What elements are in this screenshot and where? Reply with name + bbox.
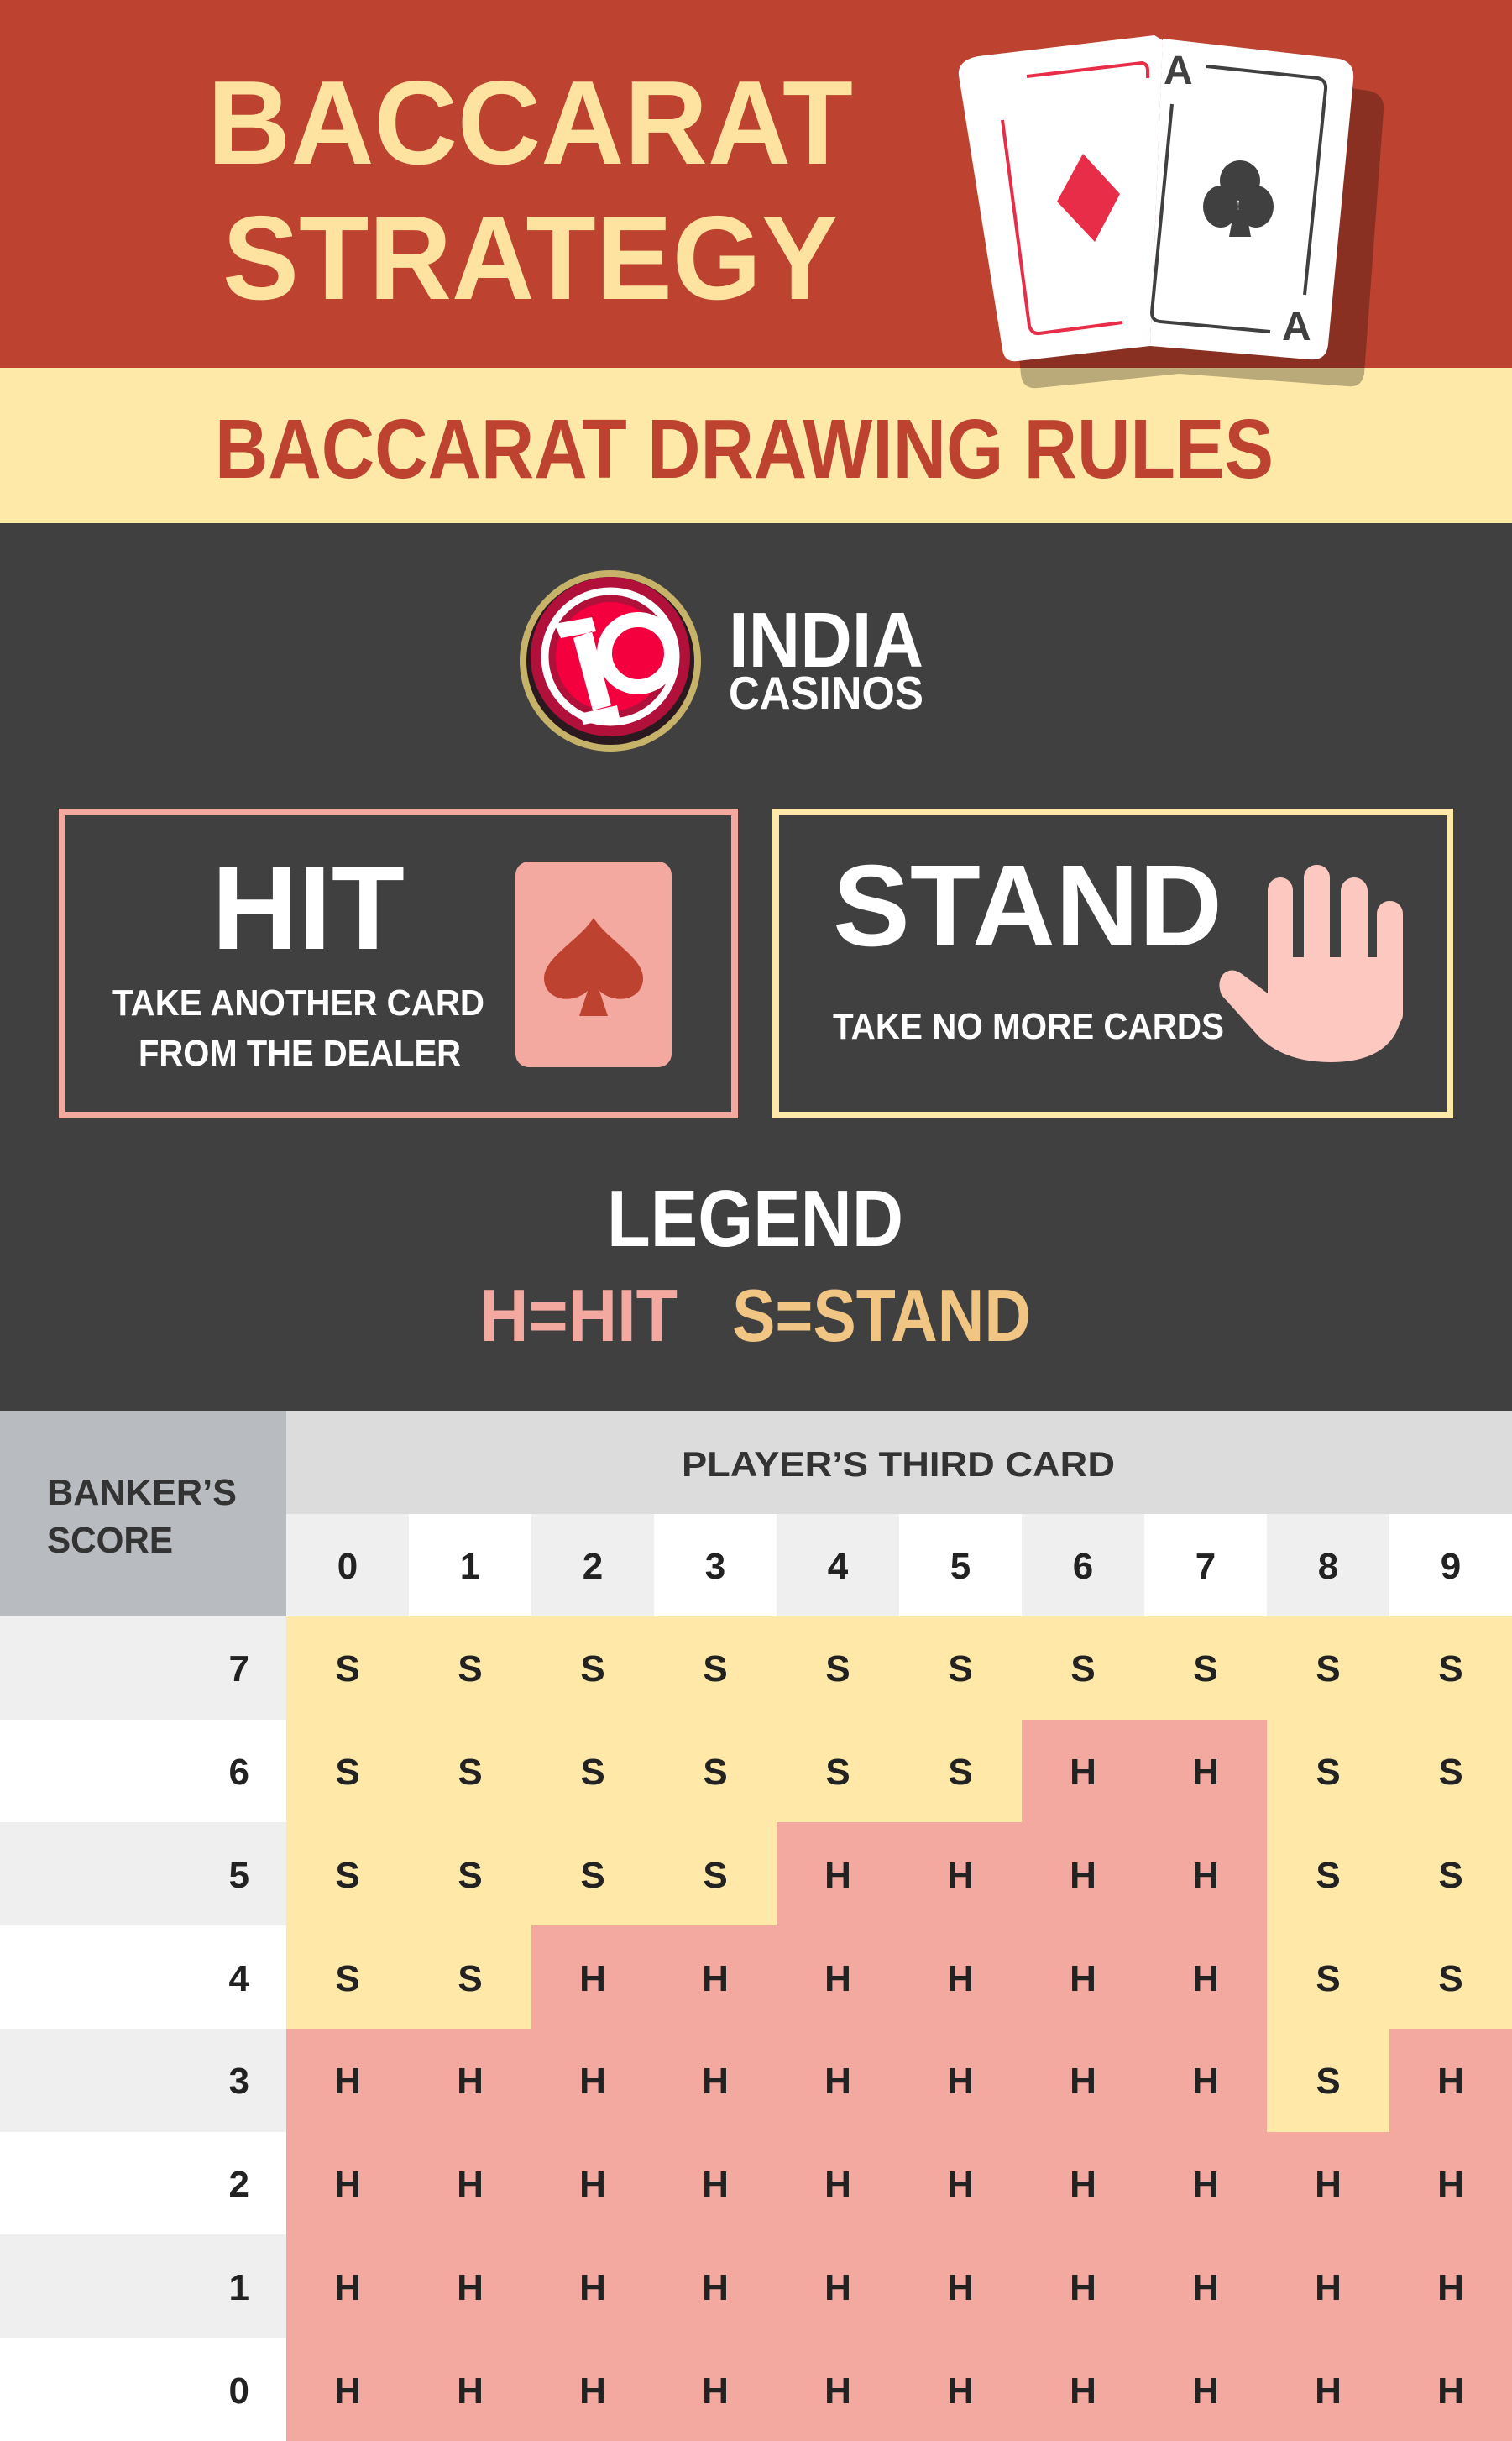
title: BACCARAT	[207, 56, 853, 190]
table rows: H	[1070, 2061, 1096, 2102]
table rows: S	[458, 1752, 483, 1793]
subtitle: BACCARAT DRAWING RULES	[215, 402, 1274, 496]
table header	[0, 1411, 1512, 1616]
table header: BANKER’S	[47, 1472, 237, 1513]
table rows: H	[702, 1958, 729, 1999]
table rows: H	[824, 2061, 851, 2102]
table rows: H	[1192, 1752, 1219, 1793]
table rows: H	[1192, 2370, 1219, 2412]
icon: playing cards: A	[1164, 49, 1193, 93]
icon: hand	[1219, 865, 1403, 1062]
table rows: H	[579, 2267, 606, 2308]
hit region	[286, 1616, 1512, 2441]
title	[207, 56, 853, 325]
table rows: H	[1192, 2267, 1219, 2308]
table rows: H	[1437, 2061, 1464, 2102]
table header: 0	[337, 1546, 358, 1587]
table rows: S	[1316, 1958, 1341, 1999]
table rows: H	[947, 1855, 974, 1896]
panel: stand	[776, 812, 1450, 1115]
table rows: S	[335, 1752, 360, 1793]
table rows: H	[1315, 2267, 1342, 2308]
table header: 8	[1318, 1546, 1338, 1587]
table rows: H	[824, 2370, 851, 2412]
table rows: S	[1438, 1958, 1463, 1999]
panel: hit	[62, 812, 735, 1115]
legend: LEGEND	[607, 1174, 903, 1264]
table rows: S	[580, 1648, 605, 1689]
stand description: TAKE NO MORE CARDS	[833, 1006, 1224, 1047]
table rows: H	[1437, 2164, 1464, 2205]
table rows: H	[824, 1855, 851, 1896]
table header: 7	[1195, 1546, 1216, 1587]
table header: 1	[460, 1546, 480, 1587]
table rows: H	[579, 2370, 606, 2412]
table rows: 4	[229, 1958, 250, 1999]
table rows: 1	[229, 2267, 249, 2308]
table header: 6	[1073, 1546, 1093, 1587]
table rows: H	[334, 2164, 361, 2205]
table rows: H	[334, 2061, 361, 2102]
header band	[0, 0, 1512, 368]
table rows: S	[335, 1958, 360, 1999]
table rows: H	[1192, 2164, 1219, 2205]
hit heading: HIT	[212, 841, 405, 975]
table rows: S	[703, 1648, 728, 1689]
table rows: H	[457, 2370, 484, 2412]
table rows: S	[458, 1648, 483, 1689]
table rows: H	[579, 2061, 606, 2102]
table rows: H	[1192, 2061, 1219, 2102]
table rows: H	[947, 1958, 974, 1999]
icon: playing cards: A	[1282, 305, 1311, 349]
icon: spade card	[515, 862, 672, 1067]
legend: H=HIT	[479, 1274, 678, 1357]
table header: SCORE	[47, 1520, 173, 1561]
table rows: H	[1315, 2164, 1342, 2205]
table header: PLAYER’S THIRD CARD	[682, 1444, 1115, 1484]
table rows: H	[1437, 2267, 1464, 2308]
table header: 4	[828, 1546, 849, 1587]
table rows: S	[948, 1648, 973, 1689]
table rows: S	[1193, 1648, 1218, 1689]
table rows: S	[580, 1855, 605, 1896]
table rows: 0	[229, 2370, 249, 2412]
table rows: S	[948, 1752, 973, 1793]
table rows: H	[1192, 1855, 1219, 1896]
table rows: 3	[229, 2061, 249, 2102]
table rows: S	[458, 1855, 483, 1896]
table rows: S	[1438, 1855, 1463, 1896]
table rows: H	[457, 2164, 484, 2205]
hit description: TAKE ANOTHER CARD	[112, 982, 484, 1024]
legend	[479, 1174, 1031, 1357]
table	[0, 1411, 1512, 2441]
table rows: S	[703, 1752, 728, 1793]
logo emblem	[520, 570, 701, 752]
table rows: H	[947, 2061, 974, 2102]
table rows: H	[1070, 2267, 1096, 2308]
table rows: S	[1316, 1855, 1341, 1896]
table rows: H	[702, 2061, 729, 2102]
table rows: S	[703, 1855, 728, 1896]
table rows: S	[1070, 1648, 1096, 1689]
table rows: H	[1070, 2370, 1096, 2412]
table header: 5	[950, 1546, 971, 1587]
table rows: H	[824, 2267, 851, 2308]
table rows: H	[1070, 2164, 1096, 2205]
table rows: H	[457, 2061, 484, 2102]
stand region	[286, 1616, 1512, 2132]
table rows: 2	[229, 2164, 249, 2205]
hit description: FROM THE DEALER	[139, 1033, 461, 1074]
table rows: H	[947, 2164, 974, 2205]
table rows: S	[335, 1648, 360, 1689]
table rows: H	[1192, 1958, 1219, 1999]
table rows: H	[1437, 2370, 1464, 2412]
table rows: S	[580, 1752, 605, 1793]
logo	[520, 570, 923, 752]
title: STRATEGY	[222, 191, 838, 325]
table rows: H	[334, 2267, 361, 2308]
logo: CASINOS	[729, 667, 923, 719]
table rows: S	[335, 1855, 360, 1896]
table rows: H	[947, 2370, 974, 2412]
table rows: S	[1438, 1648, 1463, 1689]
table rows	[0, 1616, 1512, 2441]
table rows: H	[457, 2267, 484, 2308]
table header: 2	[583, 1546, 603, 1587]
table rows: H	[702, 2164, 729, 2205]
table header: 9	[1441, 1546, 1461, 1587]
table rows: H	[579, 2164, 606, 2205]
table rows: 6	[229, 1752, 249, 1793]
legend: S=STAND	[732, 1274, 1031, 1357]
table rows: H	[702, 2267, 729, 2308]
table rows: H	[702, 2370, 729, 2412]
table rows: S	[1316, 2061, 1341, 2102]
table rows: H	[824, 2164, 851, 2205]
logo wordmark: INDIA	[729, 596, 923, 684]
stand heading: STAND	[833, 841, 1222, 971]
table rows: S	[825, 1648, 850, 1689]
table rows: H	[1070, 1855, 1096, 1896]
table rows: H	[1315, 2370, 1342, 2412]
table rows: S	[1316, 1648, 1341, 1689]
table rows: 5	[229, 1855, 249, 1896]
subtitle band	[0, 368, 1512, 523]
table rows: 7	[229, 1648, 249, 1689]
hit description	[112, 982, 484, 1074]
dark panel	[0, 523, 1512, 1411]
table rows: S	[1438, 1752, 1463, 1793]
table header: 3	[705, 1546, 725, 1587]
table rows: S	[1316, 1752, 1341, 1793]
table rows: H	[579, 1958, 606, 1999]
table rows: H	[1070, 1752, 1096, 1793]
icon: playing cards	[959, 35, 1384, 388]
table rows: H	[1070, 1958, 1096, 1999]
table rows: H	[947, 2267, 974, 2308]
table rows: H	[334, 2370, 361, 2412]
table rows: S	[458, 1958, 483, 1999]
table rows: S	[825, 1752, 850, 1793]
table rows: H	[824, 1958, 851, 1999]
